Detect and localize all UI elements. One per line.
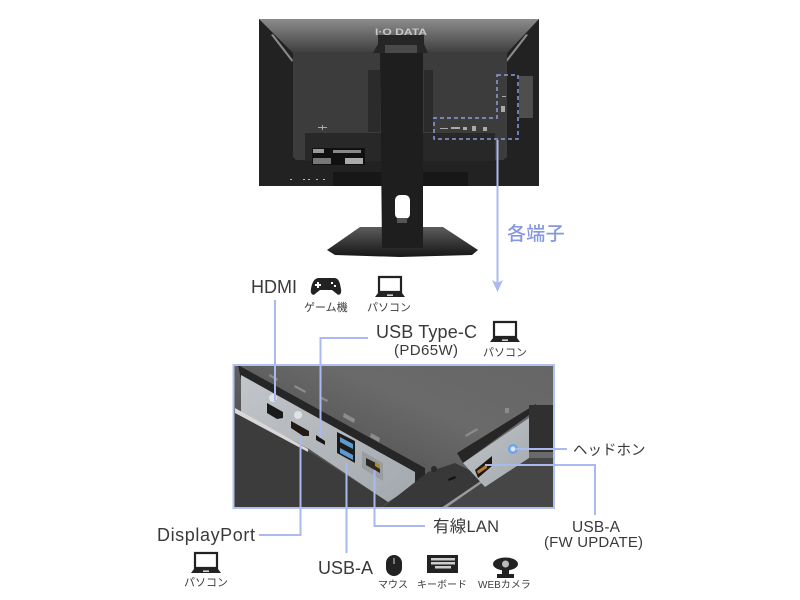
HDMI line [274,300,276,401]
rear housing [293,52,507,160]
white strip [235,408,308,452]
port marks [440,96,506,131]
lock slot [448,476,456,481]
dark edge [238,365,425,487]
stand column [380,53,423,248]
silver port panel [241,375,415,502]
icon: laptop [490,322,520,342]
center wedge [382,463,489,508]
PC caption: パソコン [367,301,411,314]
icon: game controller [311,278,341,295]
stand top cap [373,35,428,53]
HDMI port [267,403,283,419]
label: ports: 各端子 [507,223,565,245]
mouse caption: マウス [378,579,408,591]
VESA side shadows [368,70,380,132]
top bezel [259,19,539,53]
USB-A FW label: USB-A [572,519,621,536]
lower right area [446,458,554,508]
USB-A label: USB-A [318,558,373,578]
printed port icons [269,374,509,442]
cable hole [395,195,410,219]
lower housing [305,133,495,161]
USB-A FW line [485,465,595,515]
stand base [327,227,478,257]
port highlight dashed frame [434,75,518,139]
monitor body [259,19,539,186]
DisplayPort line [259,436,300,535]
rating label [312,148,365,165]
front buttons [290,179,325,180]
right dark edge [457,404,536,463]
game console caption: ゲーム機 [304,301,348,314]
icon: laptop [375,277,405,297]
right dark side [529,405,554,452]
LAN port [362,451,383,481]
port box back [519,76,533,118]
icon: mouse [386,555,402,576]
lower dark area [233,408,388,507]
keyboard caption: キーボード [417,579,467,591]
web camera caption: WEBカメラ [478,579,531,591]
USB-A FW port [475,456,492,478]
FW UPDATE caption: (FW UPDATE) [544,534,643,551]
USB-A line [346,463,348,553]
headphone label: ヘッドホン [573,443,646,459]
USB-A ports [337,432,355,463]
PC caption: パソコン [483,346,527,359]
port close-up photo [233,365,554,508]
headphone line [516,448,567,450]
headphone jack [508,444,518,454]
USB-C line [320,338,368,438]
USB Type-C label: USB Type-C [376,322,477,342]
monitor rear view [259,19,539,257]
PC caption: パソコン [184,576,228,589]
photo frame [234,365,554,508]
right silver panel [463,418,529,487]
icon: web camera [493,558,518,578]
logo: I·O DATA [375,27,428,37]
arrow from monitor to ports [492,140,503,292]
icon: keyboard [427,555,458,573]
wired LAN label: 有線LAN [433,517,499,536]
DisplayPort label: DisplayPort [157,525,255,545]
housing mark [318,125,327,130]
icon: laptop [191,553,221,573]
PD65W caption: (PD65W) [394,342,458,359]
leader lines [259,300,595,553]
DisplayPort port [291,421,309,436]
HDMI label: HDMI [251,277,297,297]
LAN line [374,470,425,526]
USB-C port [316,435,325,445]
